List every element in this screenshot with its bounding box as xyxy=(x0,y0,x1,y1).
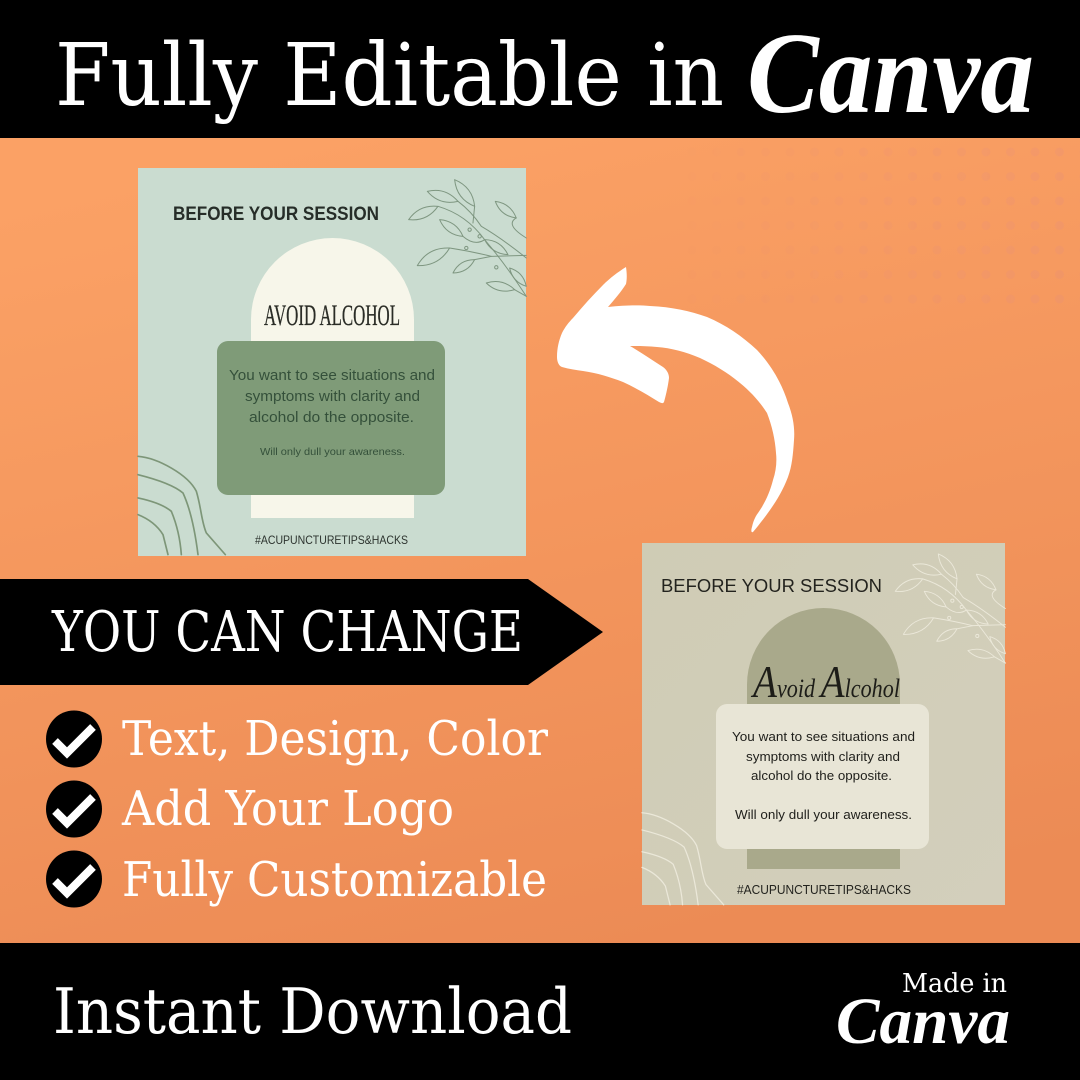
item: add your logo: Add Your Logo xyxy=(121,781,454,837)
heading: before your session: BEFORE YOUR SESSION xyxy=(173,204,379,225)
box footnote: Will only dull your awareness. xyxy=(735,807,912,822)
decorative leaf branch, green xyxy=(409,180,526,296)
panel: beige template preview xyxy=(642,543,1005,905)
arrow: curved white arrow pointing to green template xyxy=(557,267,794,532)
hashtag: #ACUPUNCTURETIPS&HACKS xyxy=(255,533,408,547)
bottom banner xyxy=(0,943,1080,1080)
orange gradient background xyxy=(0,138,1080,944)
top title banner xyxy=(0,0,1080,138)
arch title: avoid alcohol: AVOID ALCOHOL xyxy=(264,299,400,332)
olive arch xyxy=(747,608,900,869)
canva logo text: Canva xyxy=(836,985,1010,1058)
checklist xyxy=(46,710,548,908)
made in label: Made in xyxy=(902,969,1007,999)
item: fully customizable: Fully Customizable xyxy=(122,852,547,908)
box body text xyxy=(229,367,435,426)
cream arch xyxy=(251,238,414,518)
title: Canva wordmark: Canva xyxy=(747,10,1034,138)
banner: you can change: YOU CAN CHANGE xyxy=(51,600,523,665)
item: text, design, color: Text, Design, Color xyxy=(122,711,548,767)
box footnote: Will only dull your awareness. xyxy=(260,446,405,458)
arch title: avoid alcohol script: Avoid Alcohol xyxy=(750,656,900,707)
decorative contour lines, green xyxy=(138,456,225,555)
box body text xyxy=(732,729,915,783)
cream text box xyxy=(716,704,929,849)
panel: green template preview xyxy=(138,168,526,556)
box body text: You want to see situations and xyxy=(229,367,435,384)
green text box xyxy=(217,341,445,495)
title: Fully Editable in: Fully Editable in xyxy=(55,26,724,126)
box body text: alcohol do the opposite. xyxy=(249,409,414,426)
decorative contour lines, white xyxy=(642,813,724,905)
banner: you can change xyxy=(0,579,603,685)
box body text: symptoms with clarity and xyxy=(245,388,420,405)
box body text: alcohol do the opposite. xyxy=(751,768,892,783)
hashtag: #ACUPUNCTURETIPS&HACKS xyxy=(737,883,911,897)
box body text: You want to see situations and xyxy=(732,729,915,744)
decorative leaf branch, white xyxy=(895,554,1005,663)
instant download: Instant Download xyxy=(53,975,572,1048)
heading: before your session: BEFORE YOUR SESSION xyxy=(661,576,882,596)
box body text: symptoms with clarity and xyxy=(746,749,900,764)
